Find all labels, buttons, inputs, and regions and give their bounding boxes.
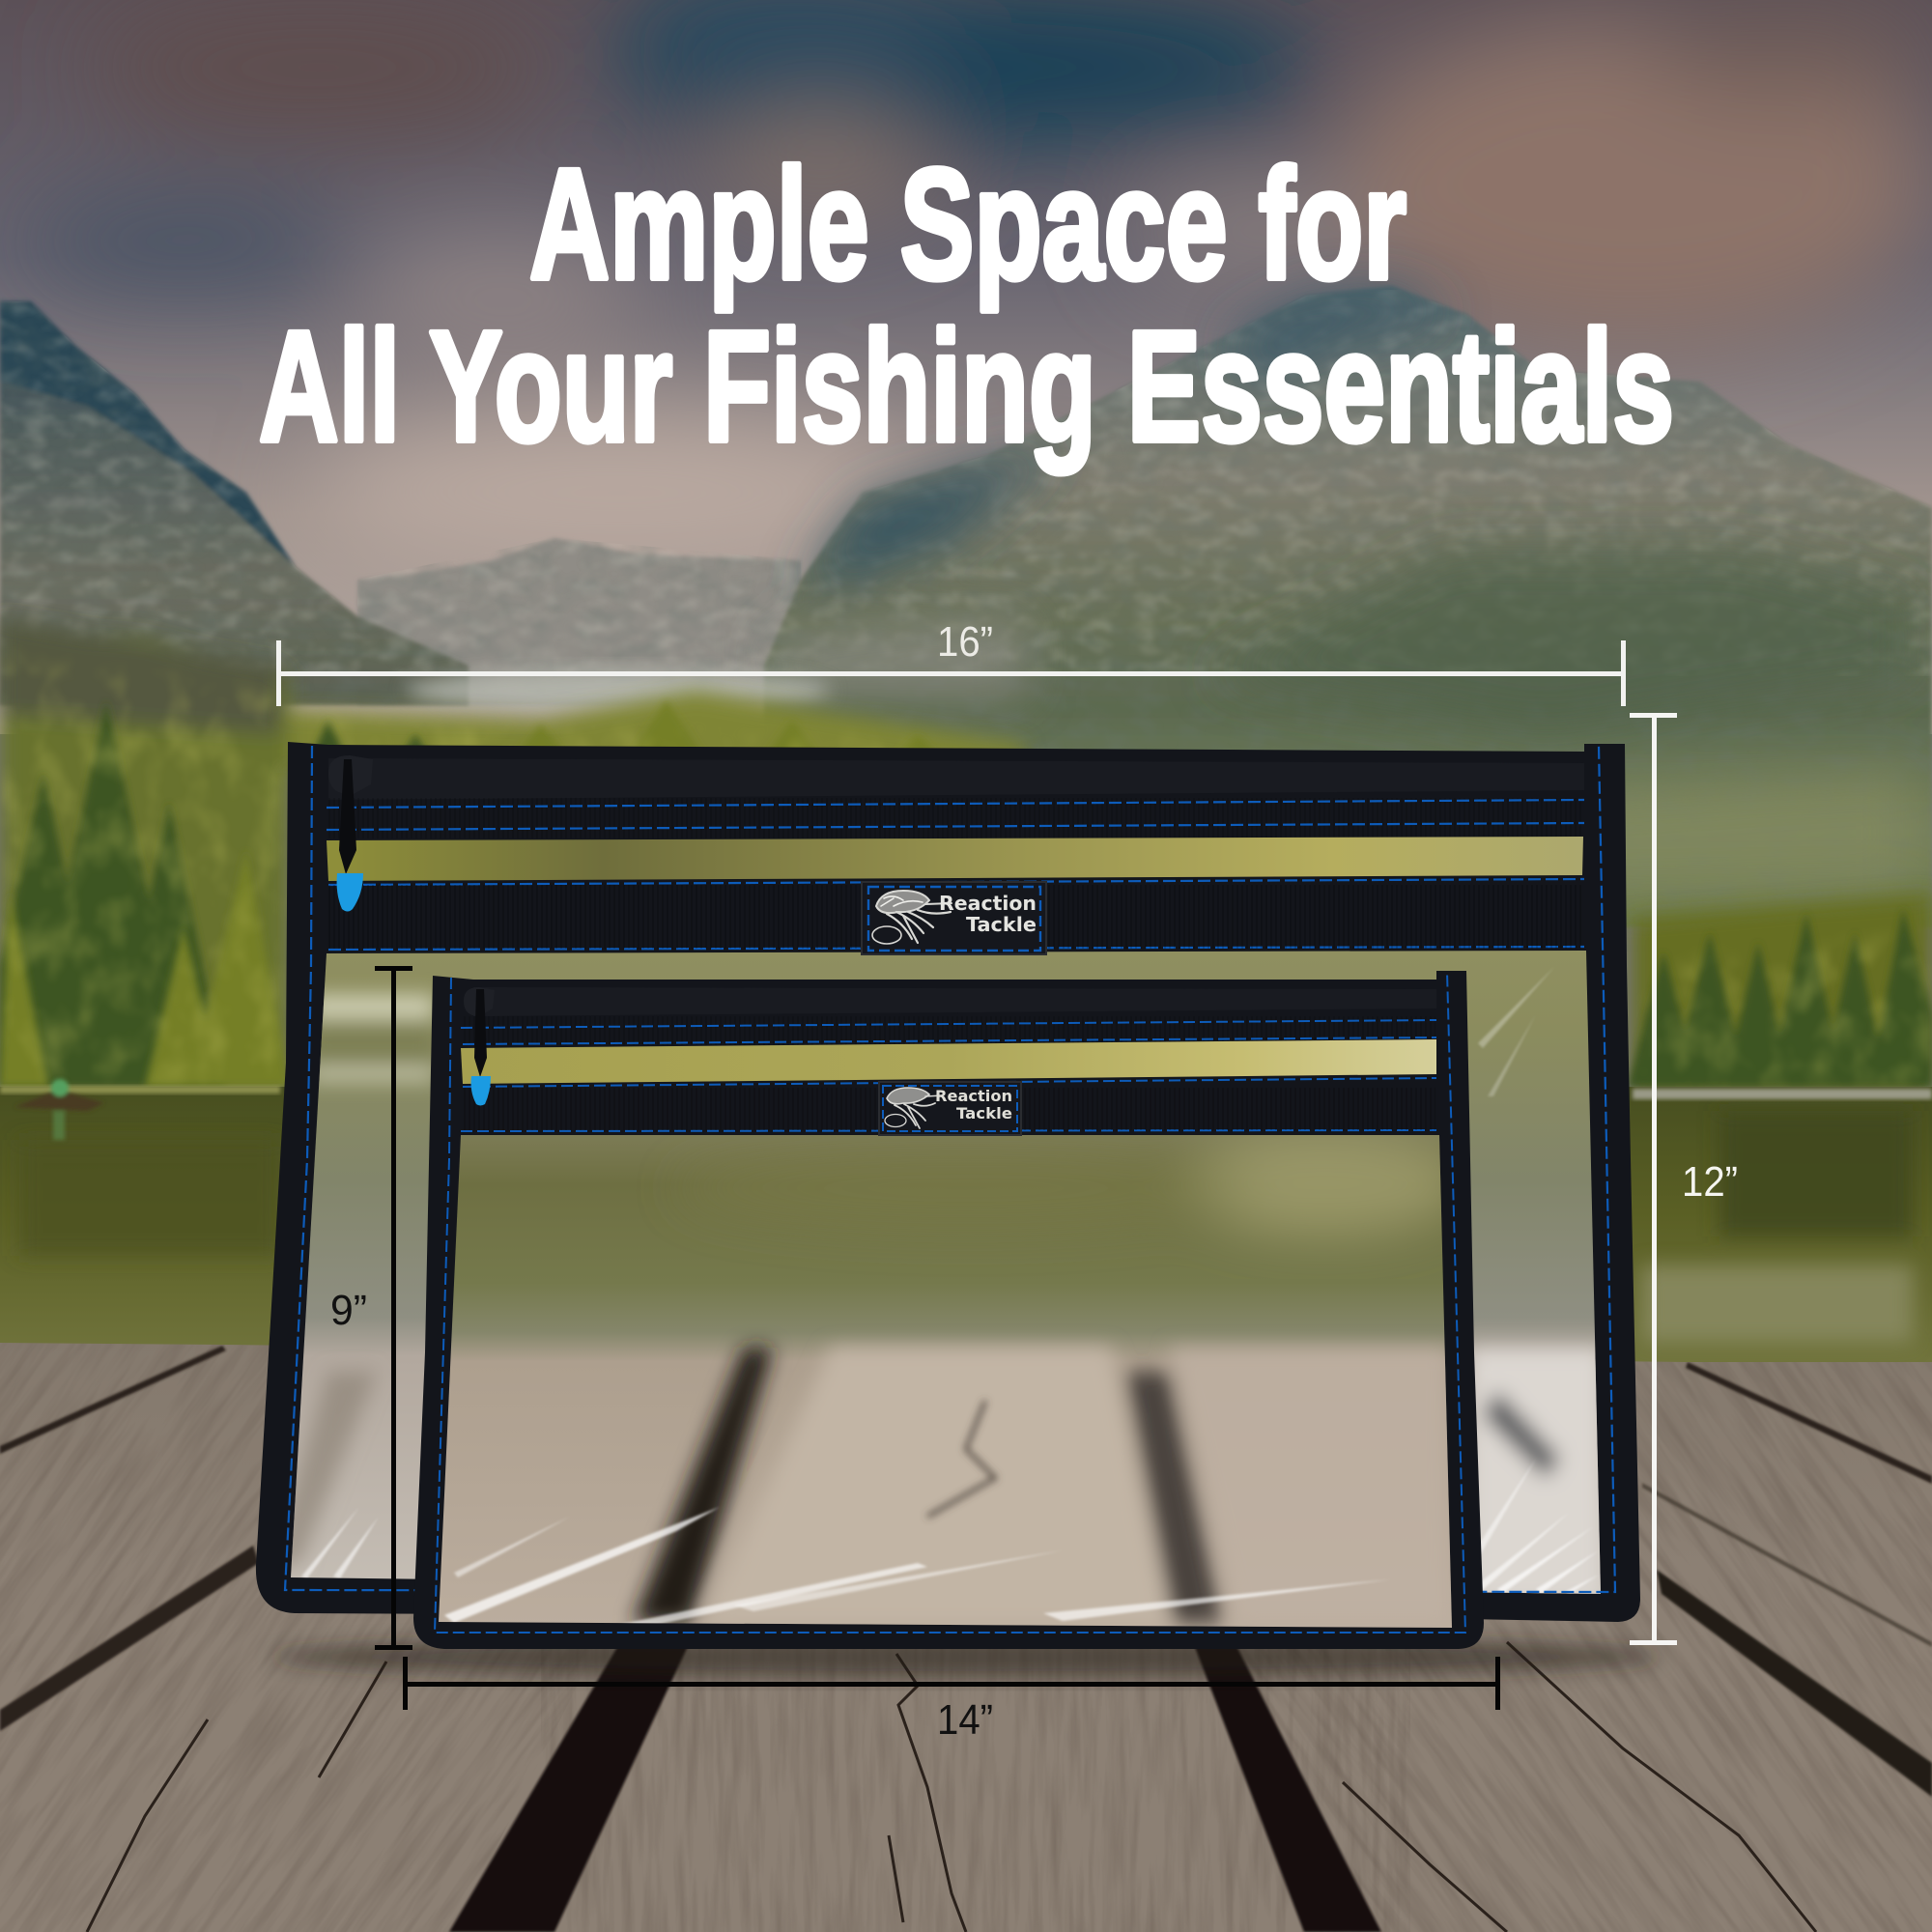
- distant mountains: [357, 538, 801, 705]
- dimension: 14 inch width: [403, 1657, 1500, 1744]
- right mountain: [764, 286, 1932, 927]
- shoreline: [1633, 1089, 1932, 1099]
- dimension: 12 inch height: [1630, 713, 1738, 1645]
- small logo patch: Reaction: [935, 1087, 1012, 1105]
- fish logo small: [885, 1088, 943, 1128]
- small boat on the lake: [14, 1079, 104, 1140]
- valley haze: [406, 669, 831, 712]
- large zip pouch: [256, 742, 1640, 1622]
- wooden dock: [0, 1338, 1932, 1932]
- left mountain: [0, 301, 469, 705]
- large logo patch: [862, 882, 1046, 954]
- large logo patch: Reaction: [939, 892, 1037, 915]
- title line 1: Ample Space for: [529, 135, 1406, 312]
- dimension: 14 inch width: 14”: [937, 1696, 993, 1744]
- large logo patch: Tackle: [966, 913, 1037, 936]
- large pouch stitching: [285, 746, 1615, 1592]
- small pouch binding: [413, 971, 1484, 1649]
- forest and tree lines: [0, 599, 1932, 1111]
- shadow beneath bags: [270, 1635, 1662, 1678]
- large pouch woven zip strip: [328, 798, 1582, 838]
- large pouch window gap: [327, 837, 1583, 881]
- small logo patch: [879, 1082, 1021, 1135]
- lake: [0, 1087, 1932, 1367]
- dock plank gaps: [0, 1346, 1932, 1932]
- sky and clouds: [0, 0, 1932, 734]
- mountain rock texture and shadows: [0, 290, 1932, 927]
- small pouch window gap: [461, 1039, 1436, 1084]
- dock cracks: [87, 1642, 1816, 1932]
- small zipper pull: [464, 987, 495, 1105]
- title: [259, 135, 1674, 474]
- small pouch clear window: [425, 1130, 1468, 1633]
- small pouch woven band: [464, 1088, 1435, 1130]
- dimension: 9 inch height: 9”: [330, 1287, 367, 1334]
- small pouch stitching: [435, 972, 1465, 1633]
- large zipper tape shading: [328, 758, 1584, 800]
- fish logo: [872, 891, 952, 944]
- large zipper pull: [328, 755, 373, 912]
- small pouch woven zip strip: [464, 1016, 1435, 1045]
- small zip pouch: [413, 971, 1484, 1649]
- dimension: 16 inch width: [276, 618, 1626, 706]
- large pouch clear window: [270, 947, 1623, 1604]
- large pouch woven band: [328, 885, 1582, 949]
- small zipper tape shading: [473, 987, 1436, 1016]
- pouch binding: [256, 742, 1640, 1622]
- dimension: 9 inch height: [330, 966, 412, 1650]
- dimension: 16 inch width: 16”: [937, 618, 993, 666]
- small logo patch: Tackle: [956, 1104, 1012, 1122]
- dimension: 12 inch height: 12”: [1682, 1158, 1738, 1206]
